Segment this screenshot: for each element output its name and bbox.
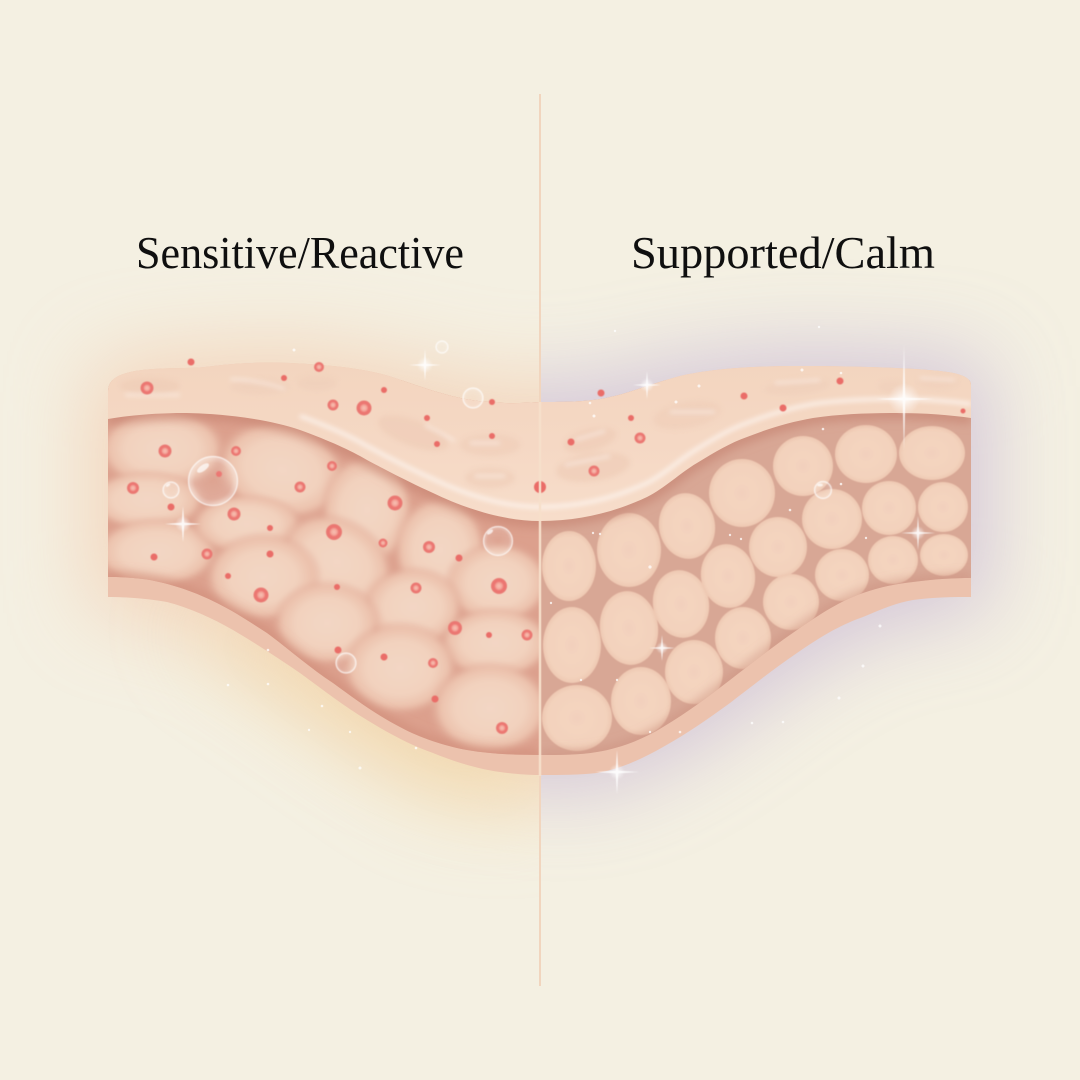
inner edge shading [540,578,971,755]
sparkles [165,345,935,794]
air bubbles [163,341,832,673]
heading: Supported/Calm: Supported/Calm [631,228,935,278]
surface highlight ridge [300,399,971,507]
skin cross-section [108,362,971,775]
orderly round cells [542,425,968,751]
shadow under upper skin layer [108,413,971,521]
small glitter dots [227,326,881,770]
divider over tissue [539,402,541,776]
vertical divider [539,94,541,986]
bubble highlights [165,462,823,535]
glow: lavender halo, right [541,316,1024,824]
infographic canvas [57,94,1024,986]
heading: Sensitive/Reactive: Sensitive/Reactive [136,228,464,278]
lower skin band [108,366,971,775]
upper skin layer [108,362,971,521]
swollen blurred cells [108,414,539,750]
panel: calm tissue [540,380,980,780]
red inflammation dots with pale centres [127,362,646,734]
glow: warm halo, left [57,316,539,846]
solid red particles [150,358,966,702]
panel: reactive tissue [108,380,539,755]
flat skin cells in upper layer [120,375,958,488]
inner edge shading [108,577,540,755]
